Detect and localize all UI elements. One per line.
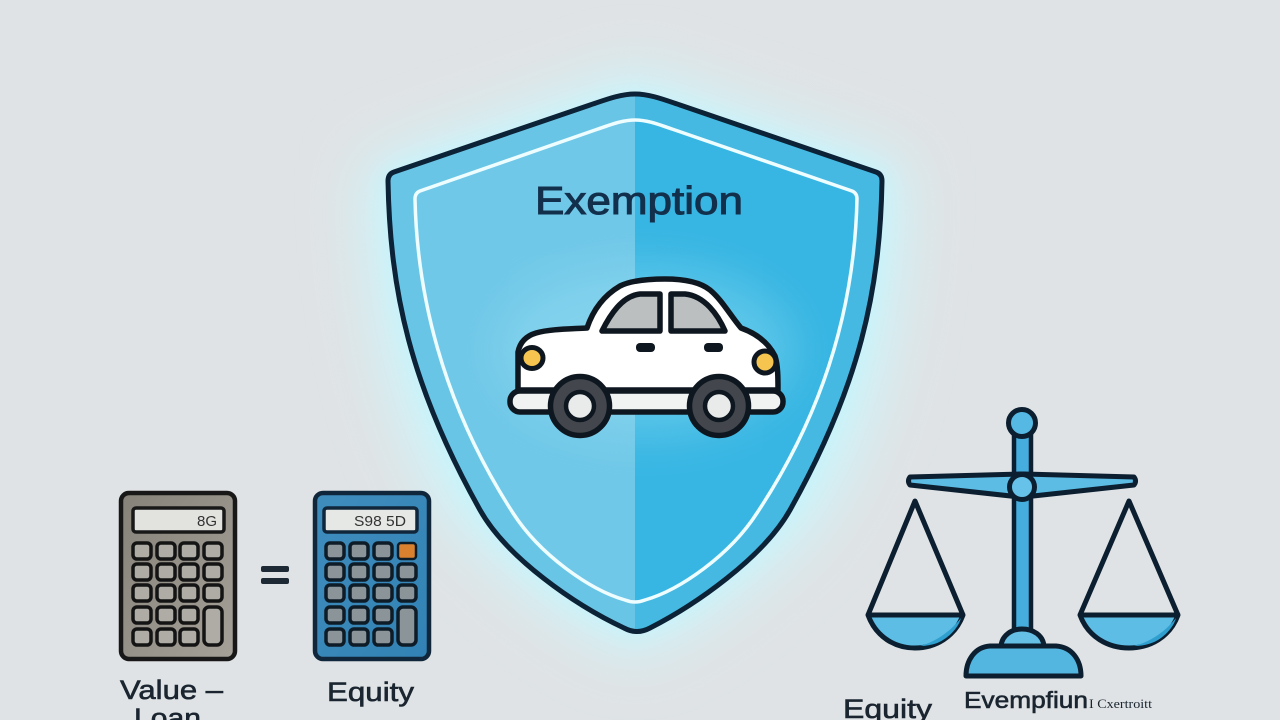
blue calculator display xyxy=(324,508,417,532)
scale pole xyxy=(1014,432,1031,637)
shield dark outline xyxy=(388,94,882,632)
shield body xyxy=(380,90,890,640)
blue calculator keys xyxy=(326,543,416,645)
car left wheel xyxy=(550,376,610,436)
shield xyxy=(380,90,890,640)
scale base foot xyxy=(966,646,1081,676)
car bumper xyxy=(510,391,783,412)
right scale pan xyxy=(1080,501,1178,648)
blue calculator readout: S98 5D xyxy=(354,513,406,530)
grey calculator readout: 8G xyxy=(197,513,217,530)
shield glow xyxy=(365,70,905,655)
label: small caption under scale: I Cxertroitt xyxy=(1089,696,1152,711)
car right headlight xyxy=(754,351,776,373)
label: exemption under scale: Evempfiun xyxy=(964,687,1088,713)
car right window xyxy=(671,294,725,331)
icon: blue calculator xyxy=(315,493,429,659)
icon: balance scale xyxy=(868,410,1178,676)
label: equity under calculator: Equity xyxy=(327,677,415,707)
blue calculator orange key xyxy=(398,543,416,559)
icon: car xyxy=(510,279,783,436)
car door handles xyxy=(636,343,723,352)
grey calculator display xyxy=(133,508,224,532)
car right wheel xyxy=(690,376,748,436)
equals sign xyxy=(261,566,289,584)
left scale pan xyxy=(868,501,963,648)
car left window xyxy=(602,294,660,331)
label: value minus loan xyxy=(120,675,223,720)
shield inner panel xyxy=(473,122,855,600)
label: value minus loan: Value – xyxy=(120,675,223,705)
grey calculator keys xyxy=(133,543,222,645)
scale base dome xyxy=(1001,629,1044,646)
scale top knob xyxy=(1008,410,1036,436)
scale beam xyxy=(908,474,1136,497)
shield inner white outline xyxy=(415,120,857,602)
infographic canvas xyxy=(118,67,1180,720)
car left headlight xyxy=(521,348,543,368)
icon: grey calculator xyxy=(121,493,235,659)
car body xyxy=(518,279,778,390)
scale centre joint xyxy=(1010,474,1034,500)
shield title: Exemption xyxy=(535,180,743,223)
